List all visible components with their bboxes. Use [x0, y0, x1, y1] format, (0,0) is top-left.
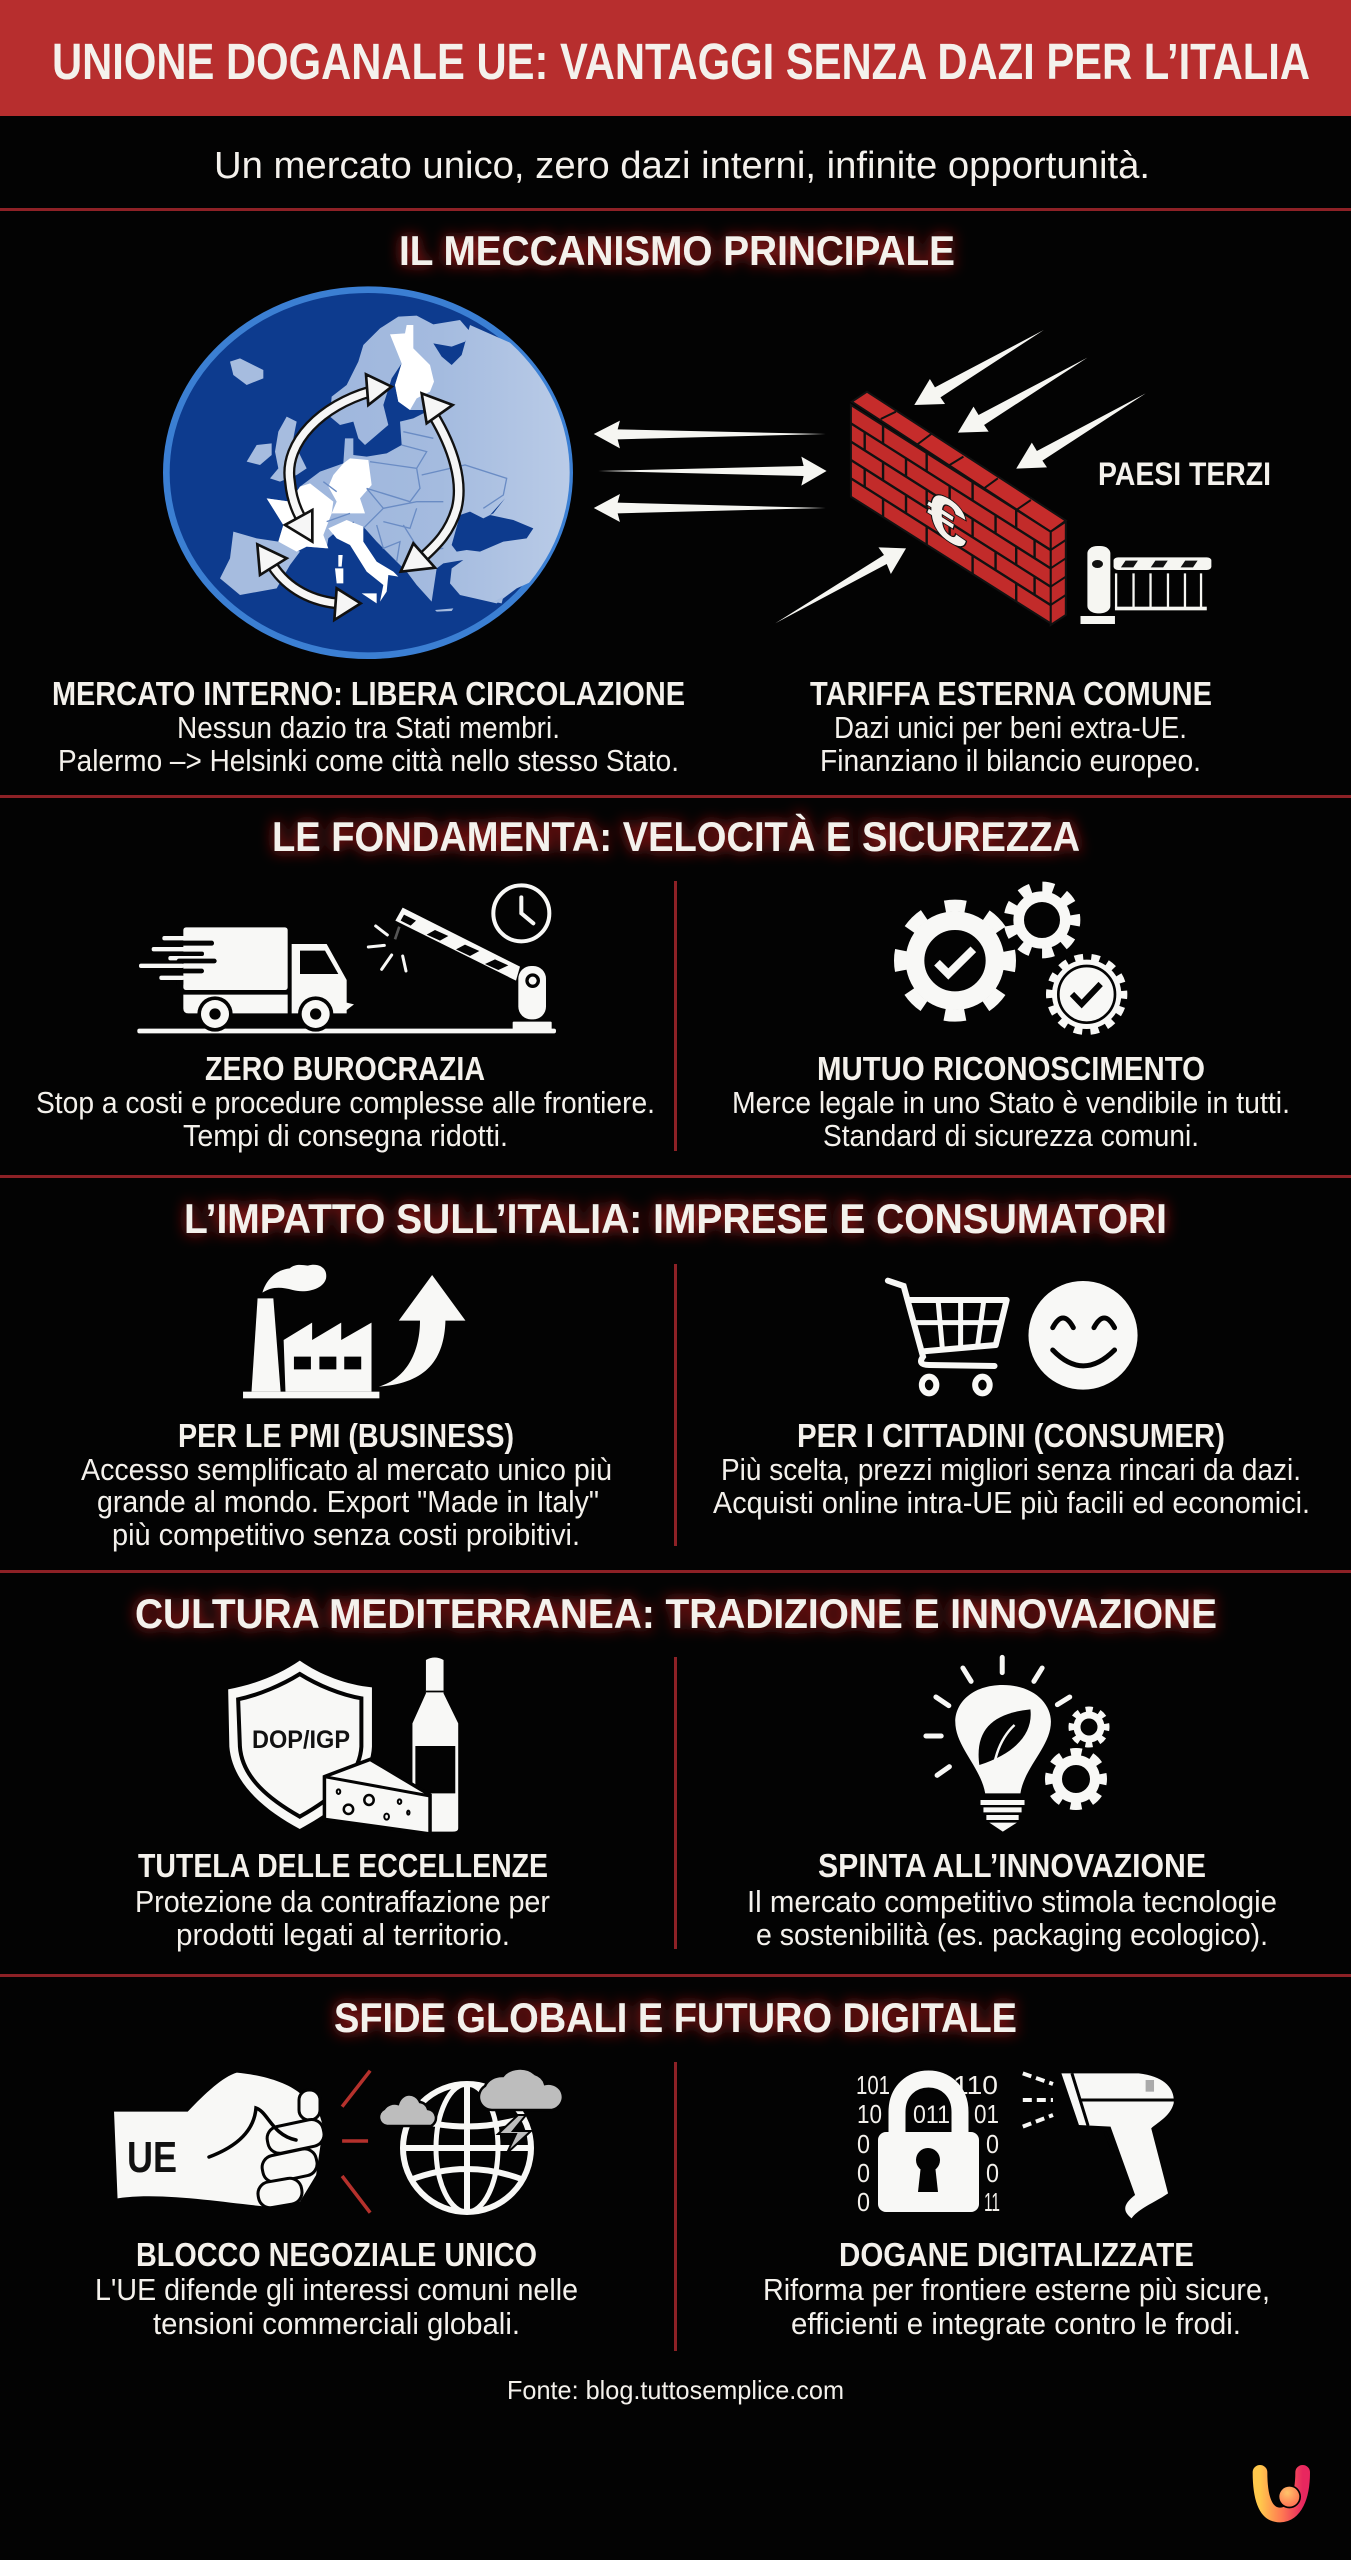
text: mercato interno: [52, 675, 685, 778]
text: per le PMI: PER LE PMI (BUSINESS): [178, 1417, 514, 1454]
text: zero burocrazia: ZERO BUROCRAZIA: [205, 1050, 485, 1087]
text: blocco negoziale unico: BLOCCO NEGOZIALE UNICO: [136, 2236, 537, 2273]
text: dogane digitalizzate: efficienti e integrate contro le frodi.: [791, 2306, 1241, 2341]
text: tutela delle eccellenze: [135, 1847, 550, 1952]
icon: digital lock and barcode scanner: 0: [857, 2187, 870, 2217]
label: paesi terzi: PAESI TERZI: [1098, 456, 1271, 492]
text: dogane digitalizzate: [763, 2236, 1270, 2341]
text: per le PMI: più competitivo senza costi proibitivi.: [112, 1517, 580, 1552]
text: tariffa esterna comune: Finanziano il bilancio europeo.: [820, 743, 1201, 778]
panel: sfide globali: [95, 1994, 1270, 2351]
subtitle: Un mercato unico, zero dazi interni, infinite opportunità.: [214, 145, 1150, 187]
icon: digital lock and barcode scanner: 0: [857, 2129, 870, 2159]
heading: sfide globali: SFIDE GLOBALI E FUTURO DIGITALE: [334, 1994, 1017, 2041]
icon: digital lock and barcode scanner: 0: [986, 2158, 999, 2188]
icon: gears with checks: [900, 887, 1123, 1031]
heading: le fondamenta: LE FONDAMENTA: VELOCITÀ E SICUREZZA: [272, 813, 1080, 860]
text: per le PMI: [81, 1417, 612, 1552]
text: blocco negoziale unico: tensioni commerciali globali.: [153, 2306, 520, 2341]
barrier: [1081, 546, 1211, 624]
icon: shield, cheese and wine: [228, 1657, 458, 1834]
text: per le PMI: Accesso semplificato al mercato unico più: [81, 1452, 612, 1487]
text: tariffa esterna comune: Dazi unici per beni extra-UE.: [834, 710, 1187, 745]
icon: fist UE against stormy globe: UE: [127, 2133, 177, 2182]
text: mutuo riconoscimento: Merce legale in uno Stato è vendibile in tutti.: [732, 1085, 1290, 1120]
icon: digital lock and barcode scanner: [856, 2070, 1175, 2218]
text: tutela delle eccellenze: TUTELA DELLE ECCELLENZE: [138, 1847, 548, 1884]
text: zero burocrazia: Tempi di consegna ridotti.: [183, 1118, 508, 1153]
text: spinta all'innovazione: Il mercato competitivo stimola tecnologie: [747, 1884, 1277, 1919]
text: per i cittadini: Più scelta, prezzi migliori senza rincari da dazi.: [721, 1452, 1301, 1487]
heading: impatto: L’IMPATTO SULL’ITALIA: IMPRESE E CONSUMATORI: [184, 1195, 1167, 1242]
icon: factory with rising arrow: [243, 1265, 465, 1398]
icon: fist UE against stormy globe: [114, 2069, 563, 2213]
panel: cultura mediterranea: [135, 1590, 1277, 1952]
text: per i cittadini: [713, 1417, 1310, 1520]
text: zero burocrazia: [36, 1050, 655, 1153]
icon: digital lock and barcode scanner: 0: [857, 2158, 870, 2188]
text: per i cittadini: Acquisti online intra-UE più facili ed economici.: [713, 1485, 1310, 1520]
icon: digital lock and barcode scanner: 01: [974, 2099, 999, 2129]
text: per i cittadini: PER I CITTADINI (CONSUMER): [797, 1417, 1225, 1454]
icon: digital lock and barcode scanner: 0: [986, 2129, 999, 2159]
text: mutuo riconoscimento: Standard di sicurezza comuni.: [823, 1118, 1199, 1153]
icon: bulb with leaf and gears: [926, 1657, 1106, 1832]
text: dogane digitalizzate: Riforma per frontiere esterne più sicure,: [763, 2272, 1270, 2307]
logo: [1260, 2472, 1303, 2515]
panel: le fondamenta: [36, 813, 1290, 1153]
panel: impatto sull'Italia: [81, 1195, 1310, 1552]
text: spinta all'innovazione: SPINTA ALL’INNOVAZIONE: [818, 1847, 1206, 1884]
text: blocco negoziale unico: [95, 2236, 578, 2341]
euro symbol: €: [927, 472, 967, 565]
text: mercato interno: Nessun dazio tra Stati membri.: [177, 710, 560, 745]
text: mercato interno: MERCATO INTERNO: LIBERA CIRCOLAZIONE: [52, 675, 685, 712]
source note: Fonte: blog.tuttosemplice.com: [507, 2375, 844, 2405]
text: dogane digitalizzate: DOGANE DIGITALIZZATE: [839, 2236, 1194, 2273]
text: tariffa esterna comune: [810, 675, 1212, 778]
text: zero burocrazia: Stop a costi e procedure complesse alle frontiere.: [36, 1085, 655, 1120]
text: mutuo riconoscimento: [732, 1050, 1290, 1153]
icon: digital lock and barcode scanner: 110: [953, 2070, 998, 2100]
icon: digital lock and barcode scanner: 011: [913, 2101, 950, 2129]
text: mutuo riconoscimento: MUTUO RICONOSCIMENTO: [817, 1050, 1205, 1087]
header banner: [0, 0, 1351, 116]
icon: digital lock and barcode scanner: 10: [857, 2099, 882, 2129]
heading: il meccanismo principale: IL MECCANISMO PRINCIPALE: [399, 227, 955, 274]
wall, arrows and barrier: [594, 330, 1211, 625]
text: per le PMI: grande al mondo. Export "Made in Italy": [97, 1484, 599, 1519]
icon: shield, cheese and wine: DOP/IGP: [252, 1726, 350, 1754]
text: spinta all'innovazione: e sostenibilità (es. packaging ecologico).: [756, 1917, 1268, 1952]
text: tariffa esterna comune: TARIFFA ESTERNA COMUNE: [810, 675, 1212, 712]
brick wall: [851, 392, 1066, 625]
internal trade arrows: [257, 374, 459, 620]
panel: il meccanismo principale: [52, 227, 1271, 778]
text: blocco negoziale unico: L'UE difende gli interessi comuni nelle: [95, 2272, 578, 2307]
text: tutela delle eccellenze: prodotti legati al territorio.: [176, 1917, 510, 1952]
icon: shopping cart and smiley: [888, 1281, 1138, 1393]
icon: digital lock and barcode scanner: 11: [984, 2187, 1000, 2217]
icon: digital lock and barcode scanner: 101: [856, 2070, 890, 2100]
globe with map of Europe: [166, 290, 583, 656]
text: tutela delle eccellenze: Protezione da contraffazione per: [135, 1884, 550, 1919]
text: spinta all'innovazione: [747, 1847, 1277, 1952]
text: mercato interno: Palermo –> Helsinki come città nello stesso Stato.: [58, 743, 679, 778]
icon: truck, barrier and clock: [137, 885, 556, 1033]
heading: cultura mediterranea: CULTURA MEDITERRANEA: TRADIZIONE E INNOVAZIONE: [135, 1590, 1217, 1637]
trade flow arrows: [594, 330, 1146, 623]
